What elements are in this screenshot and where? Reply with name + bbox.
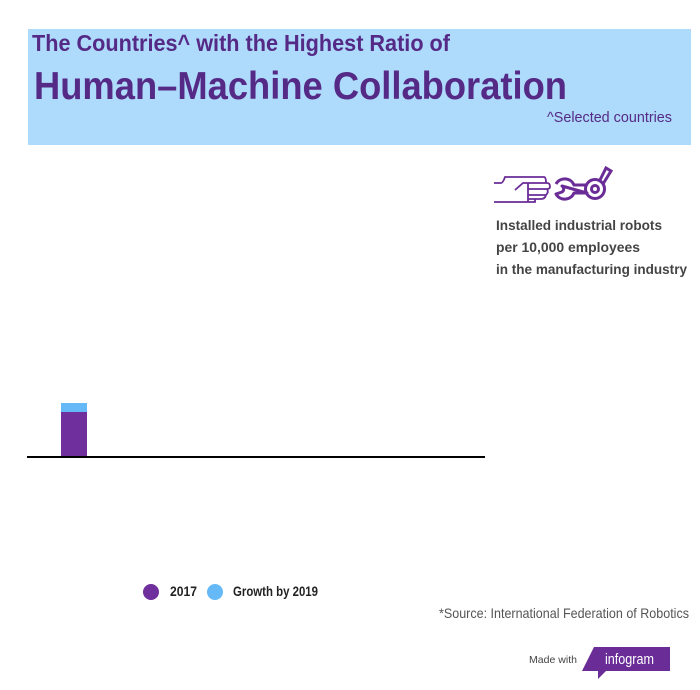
header banner — [28, 29, 691, 145]
chart axis — [27, 456, 485, 458]
chart description — [496, 217, 687, 277]
legend marker: 2017 — [143, 584, 159, 600]
chart description: in the manufacturing industry — [496, 261, 687, 277]
made with infogram badge: Made with — [529, 654, 577, 666]
chart description: Installed industrial robots — [496, 217, 662, 233]
title line 1: The Countries^ with the Highest Ratio of — [32, 30, 450, 56]
chart description: per 10,000 employees — [496, 239, 640, 255]
logo wordmark: infogram — [605, 651, 654, 668]
logo flag — [582, 647, 670, 679]
main title: Human–Machine Collaboration — [34, 65, 567, 108]
bar: 2017 — [61, 412, 87, 456]
note: selected countries: ^Selected countries — [547, 110, 672, 126]
made with infogram badge — [529, 647, 670, 679]
icon: human hand and robot arm — [494, 168, 611, 202]
legend — [143, 584, 318, 600]
icon: human hand — [494, 177, 550, 202]
icon: robot wrench arm — [556, 168, 611, 199]
legend label: growth by 2019: Growth by 2019 — [233, 584, 318, 599]
legend label: 2017: 2017 — [170, 584, 197, 599]
bar: growth by 2019 — [61, 403, 87, 412]
stacked bar chart — [27, 403, 485, 458]
legend marker: growth by 2019 — [207, 584, 223, 600]
